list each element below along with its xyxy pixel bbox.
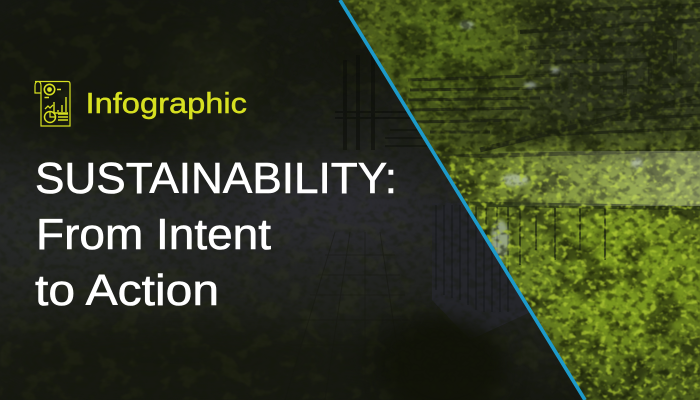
icon: trend line [45,105,53,109]
title [35,154,397,315]
icon: bar chart [54,97,68,113]
tower grid lower [318,232,400,296]
sky patches [460,21,643,260]
icon: gauge [44,84,55,95]
title line 3: to Action [35,266,219,315]
title line 2: From Intent [36,210,271,259]
building base band [435,148,700,158]
tree lower right [404,312,498,398]
light haze [512,151,700,206]
dark tree canopy and tower shading [0,36,392,357]
icon: text lines [44,90,68,120]
leaf texture [330,0,700,400]
title line 1: SUSTAINABILITY: [35,154,397,203]
glass tower lower [470,202,700,272]
icon: pie chart [44,112,56,122]
building side with windows [432,242,529,332]
panel: bright green photo [330,0,700,400]
label: Infographic: Infographic [86,88,247,120]
dark leaf texture [0,158,526,329]
building floors on dark side [335,62,428,150]
foliage clumps [330,0,700,400]
icon: infographic document [35,82,70,126]
foliage and building glow [385,0,700,400]
building floors upper right [408,5,700,150]
icon: page outline [35,82,70,126]
blue diagonal line [340,0,585,400]
